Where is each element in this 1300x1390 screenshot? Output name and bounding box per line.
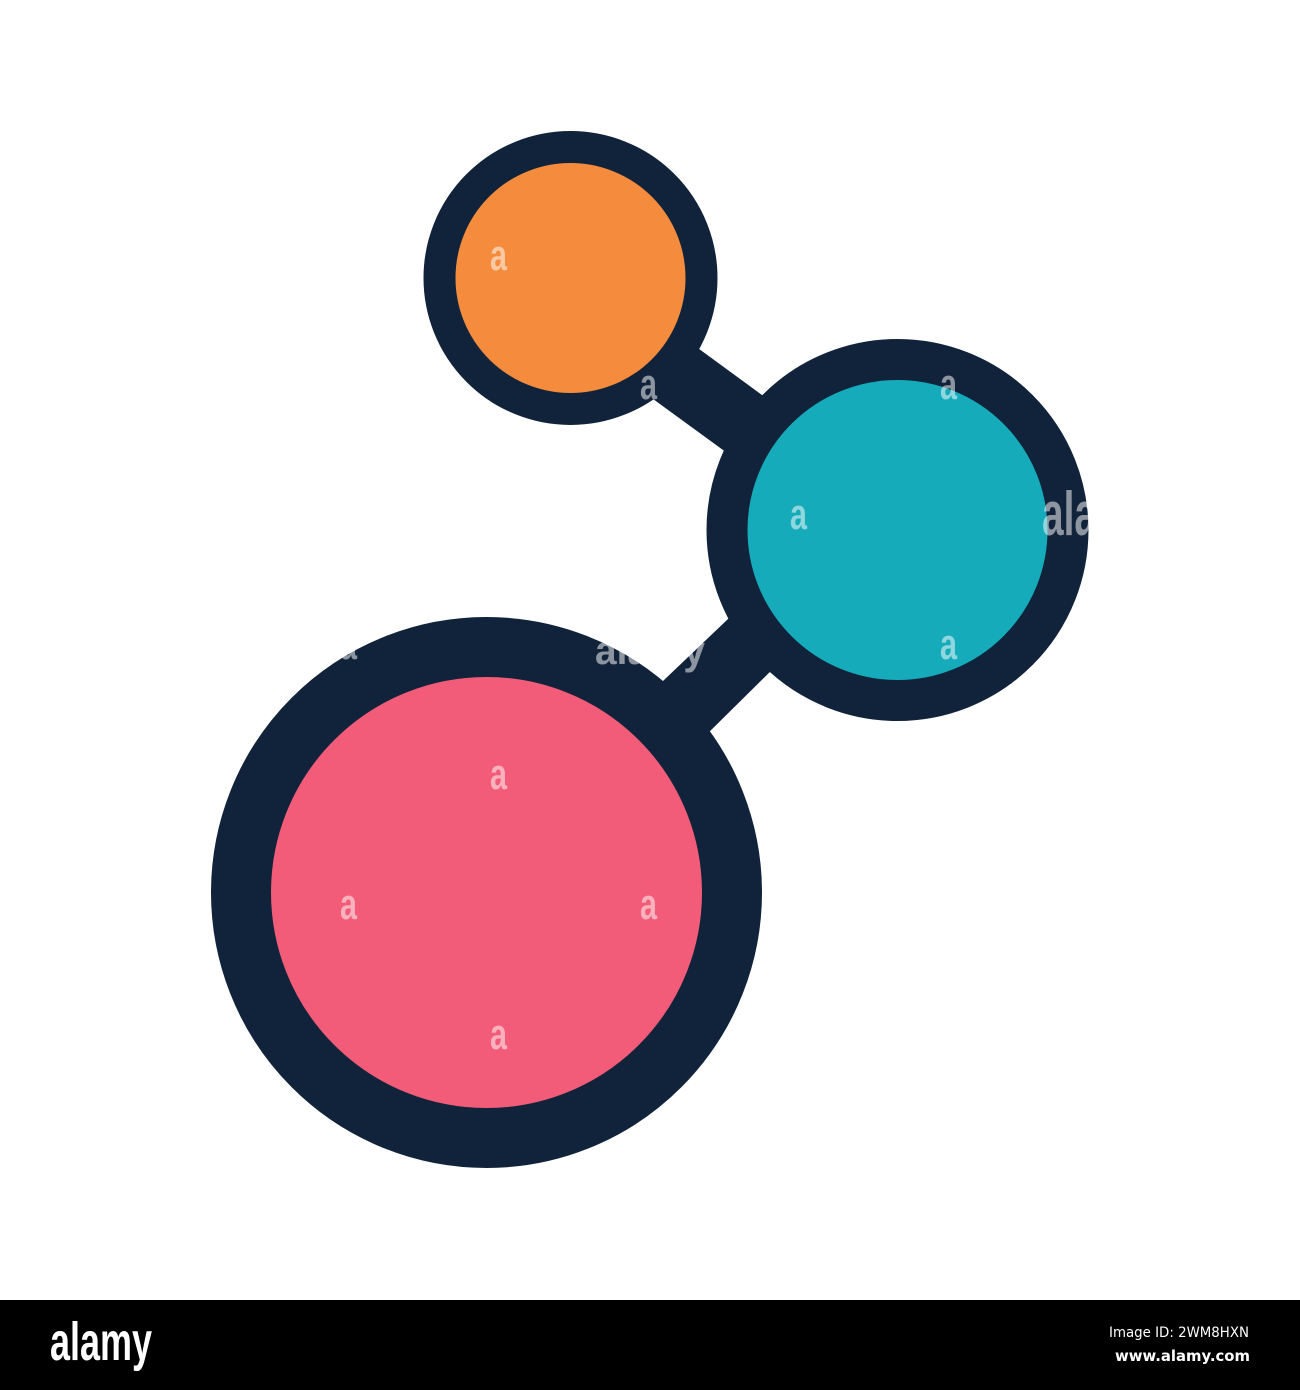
footer bar <box>0 1300 1300 1390</box>
watermark marks: a <box>640 360 657 409</box>
connector: orange to teal <box>640 335 775 459</box>
node: pink circle <box>241 647 732 1138</box>
watermark marks: a <box>640 880 657 929</box>
watermark marks: a <box>490 1010 507 1059</box>
footer site url: www.alamy.com <box>1115 1347 1250 1365</box>
watermark marks: alamy <box>595 629 706 673</box>
watermark marks: a <box>340 880 357 929</box>
node: teal circle <box>727 360 1068 700</box>
watermark marks: ala <box>1042 480 1096 549</box>
watermark marks: a <box>940 620 957 669</box>
watermark marks <box>340 231 1096 1059</box>
icon: molecule <box>241 147 1068 1138</box>
footer logo: alamy: alamy <box>50 1312 152 1372</box>
footer image id: Image ID: 2WM8HXN <box>1109 1325 1249 1341</box>
watermark marks: a <box>790 490 807 539</box>
watermark marks: a <box>940 360 957 409</box>
node: orange circle <box>440 147 702 409</box>
connector: teal to pink <box>650 607 781 743</box>
watermark marks: a <box>490 750 507 799</box>
watermark marks: a <box>340 620 357 669</box>
watermark marks: a <box>490 231 507 280</box>
